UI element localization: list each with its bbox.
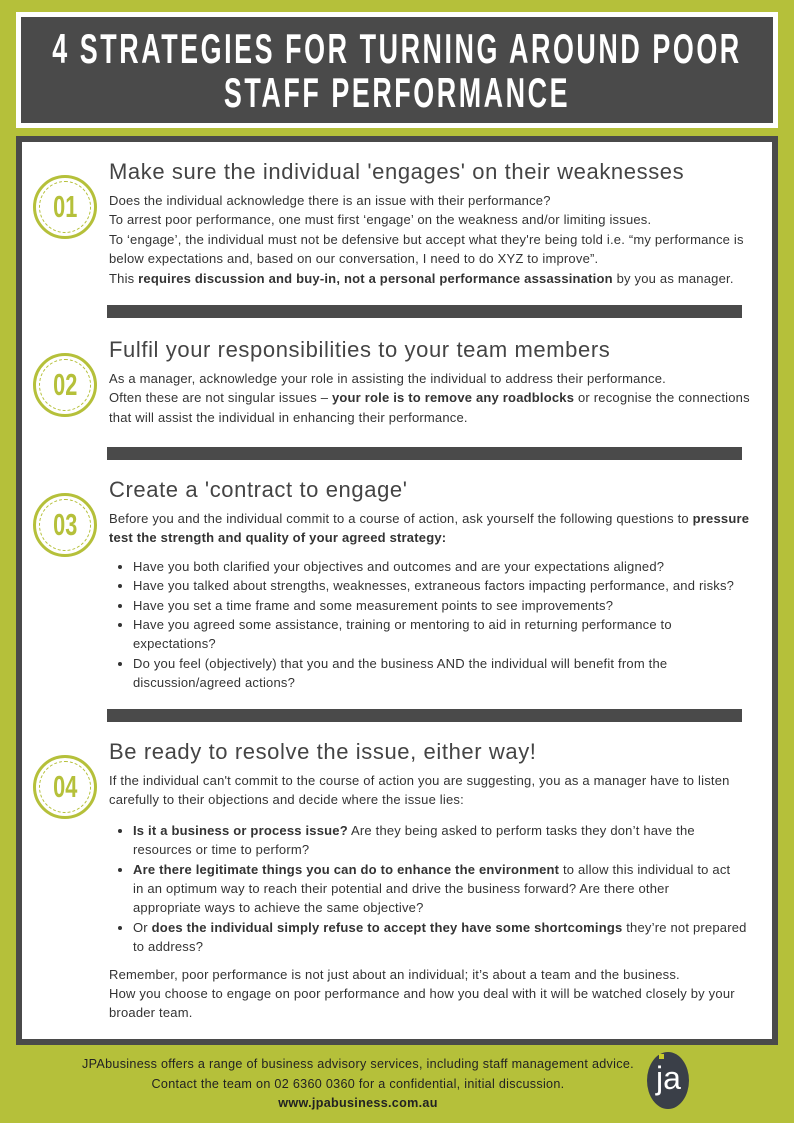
section 4: in an optimum way to reach their potential and drive the business forward? Are there other [133, 881, 669, 896]
section 2 [109, 337, 750, 425]
section 3: Do you feel (objectively) that you and the business AND the individual will benefit from the [133, 656, 667, 671]
section 4: Be ready to resolve the issue, either way! [109, 739, 537, 764]
section 3 [109, 477, 749, 690]
icon: logo [647, 1052, 689, 1109]
section 1: below expectations and, based on our conversation, I need to do XYZ to improve”. [109, 251, 598, 266]
section 2: that will assist the individual in enhancing their performance. [109, 410, 468, 425]
icon: number 02: 02 [53, 367, 77, 402]
footer text: Contact the team on 02 6360 0360 for a confidential, initial discussion. [152, 1076, 564, 1090]
icon: number 03: 03 [53, 507, 77, 542]
section 3: test the strength and quality of your agreed strategy: [109, 530, 446, 545]
footer text: www.jpabusiness.com.au [278, 1096, 438, 1110]
section 1: Make sure the individual 'engages' on their weaknesses [109, 159, 684, 184]
title [16, 12, 778, 128]
icon: number 02 [33, 353, 97, 417]
section 4: resources or time to perform? [133, 842, 309, 857]
section 1: This requires discussion and buy-in, not a personal performance assassination by you as manager. [109, 271, 734, 286]
section 1: To ‘engage’, the individual must not be defensive but accept what they're being told i.e. “my performance is [109, 232, 744, 247]
section 4: How you choose to engage on poor performance and how you deal with it will be watched closely by your [109, 986, 735, 1001]
section 3: Before you and the individual commit to a course of action, ask yourself the following questions to pressure [109, 511, 749, 526]
section 1: To arrest poor performance, one must first ‘engage’ on the weakness and/or limiting issues. [109, 212, 651, 227]
panel: main content [16, 136, 778, 1045]
icon: number 01: 01 [53, 189, 77, 224]
title: STAFF PERFORMANCE [224, 69, 570, 116]
section 4: Or does the individual simply refuse to accept they have some shortcomings they’re not prepared [133, 920, 747, 935]
section 3: Have you agreed some assistance, training or mentoring to aid in returning performance to [133, 617, 672, 632]
section 3: Have you both clarified your objectives and outcomes and are your expectations aligned? [133, 559, 664, 574]
section 3: Have you talked about strengths, weaknesses, extraneous factors impacting performance, and risks? [133, 578, 734, 593]
footer text [82, 1057, 634, 1110]
icon: logo: ja [656, 1060, 681, 1096]
section 4: If the individual can't commit to the course of action you are suggesting, you as a manager have to listen [109, 773, 730, 788]
section 2: Often these are not singular issues – your role is to remove any roadblocks or recognise the connections [109, 390, 750, 405]
section 2: As a manager, acknowledge your role in assisting the individual to address their performance. [109, 371, 666, 386]
section 4: to address? [133, 939, 203, 954]
section 3: expectations? [133, 636, 216, 651]
icon: number 04 [33, 755, 97, 819]
section 2: Fulfil your responsibilities to your team members [109, 337, 610, 362]
section 4: appropriate ways to achieve the same objective? [133, 900, 424, 915]
section 4: Are there legitimate things you can do to enhance the environment to allow this individual to act [133, 862, 730, 877]
section 3: Create a 'contract to engage' [109, 477, 408, 502]
section 1: Does the individual acknowledge there is an issue with their performance? [109, 193, 551, 208]
section 3: discussion/agreed actions? [133, 675, 295, 690]
section 1 [109, 159, 744, 286]
section 4: Is it a business or process issue? Are they being asked to perform tasks they don’t have the [133, 823, 695, 838]
section 3: Have you set a time frame and some measurement points to see improvements? [133, 598, 613, 613]
icon: number 03 [33, 493, 97, 557]
footer text: JPAbusiness offers a range of business advisory services, including staff management advice. [82, 1057, 634, 1071]
section 4: carefully to their objections and decide where the issue lies: [109, 792, 464, 807]
icon: number 01 [33, 175, 97, 239]
title: 4 STRATEGIES FOR TURNING AROUND POOR [52, 25, 742, 72]
section 4: Remember, poor performance is not just about an individual; it’s about a team and the business. [109, 967, 680, 982]
section 4 [109, 739, 747, 1020]
section 4: broader team. [109, 1005, 193, 1020]
icon: number 04: 04 [53, 769, 77, 804]
